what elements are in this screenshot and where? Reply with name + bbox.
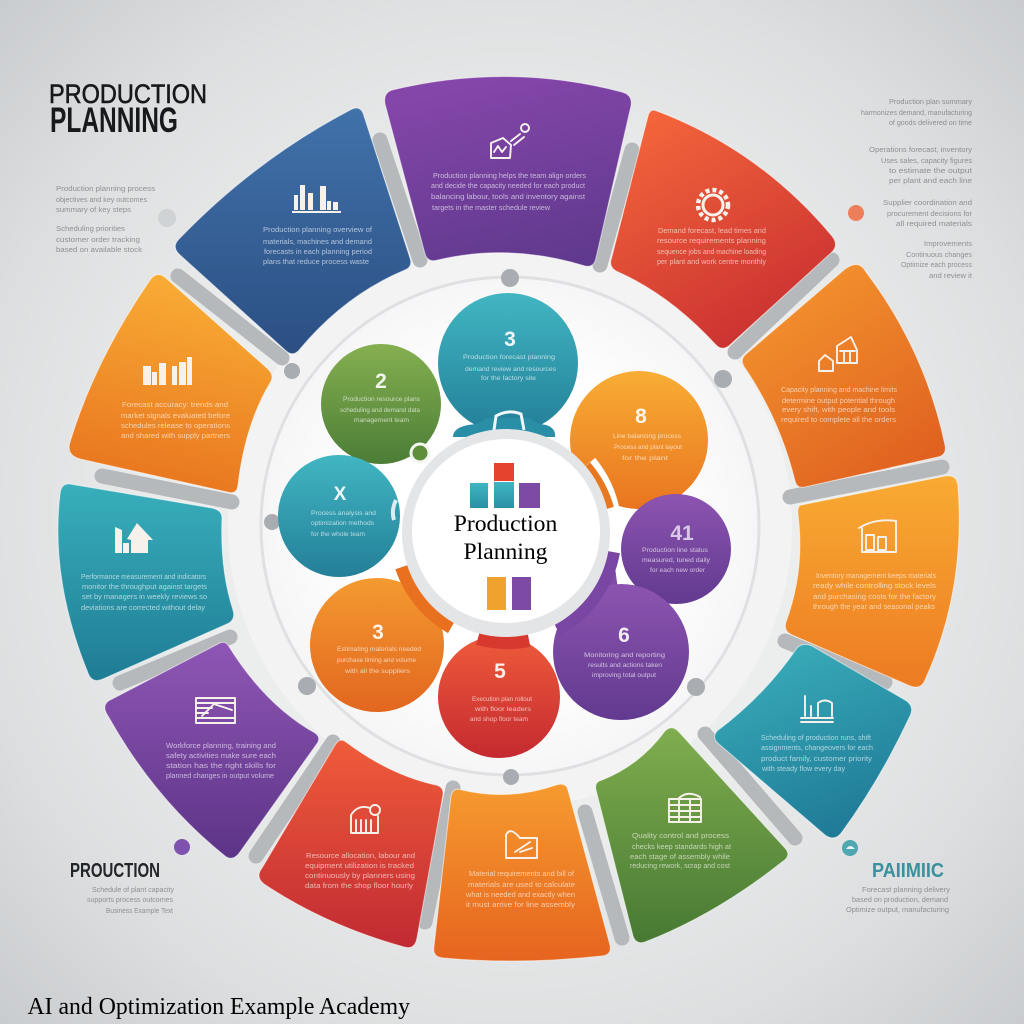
circle copy: with floor leaders [474, 706, 532, 713]
segment shape orange left [69, 274, 272, 493]
text: teal left copy: deviations are corrected without delay [81, 605, 206, 612]
text: blue segment copy [263, 227, 372, 266]
icon: warehouse [859, 520, 896, 552]
side note: top left: Scheduling priorities [56, 226, 126, 233]
text: red lower copy: data from the shop floor hourly [305, 883, 414, 890]
number 3: 3 [372, 621, 384, 644]
icon: orange dot [848, 205, 864, 221]
circle copy: Estimating materials needed [337, 646, 421, 653]
segment shape red top [611, 110, 836, 348]
text: teal left copy: monitor the throughput against targets [82, 584, 208, 591]
text: purple left copy: station has the right skills for [166, 763, 277, 770]
circle copy: and shop floor team [470, 716, 528, 723]
side note: top left: customer order tracking [56, 237, 140, 244]
text: red lower copy [305, 853, 415, 890]
copy [87, 887, 174, 915]
number 3: 3 [504, 328, 516, 351]
text: orange right lower copy: ready while controlling stock levels [813, 583, 937, 590]
circle 2 green [321, 344, 441, 464]
main title [49, 79, 207, 140]
text: purple left copy: planned changes in output volume [166, 773, 274, 780]
text: orange bottom copy [465, 871, 576, 909]
panel: teal right segment [715, 644, 912, 838]
circle copy [613, 433, 682, 462]
segment shape green [596, 728, 788, 943]
text: teal right copy: assignments, changeovers for each [761, 745, 873, 752]
text: purple top copy: and decide the capacity needed for each product [431, 183, 585, 190]
circle copy: purchase timing and volume [337, 657, 416, 664]
segment shape purple left [105, 642, 319, 858]
circle copy: Execution plan rollout [472, 696, 532, 703]
icon: factory dome [351, 805, 380, 833]
circle 6 purple [553, 552, 689, 720]
circle copy: Production resource plans [343, 396, 421, 403]
copy [846, 887, 951, 914]
heading: PAIIMIIC [872, 860, 944, 882]
text: orange left copy: schedules release to operations [121, 423, 231, 430]
circle copy: optimization methods [311, 520, 375, 527]
side note: top right: Optimize each process [901, 262, 972, 269]
text: orange bottom copy: what is needed and exactly when [465, 892, 575, 899]
circle copy [584, 652, 665, 679]
circle copy: for the whole team [311, 531, 365, 538]
side note: top right: all required materials [896, 221, 973, 228]
text: teal right copy: product family, customer priority [761, 756, 873, 763]
icon: grey dot [158, 209, 176, 227]
text: purple left copy: safety activities make sure each [166, 753, 276, 760]
hub connector: coloured arcs [393, 463, 613, 642]
text: red top copy: per plant and work centre monthly [657, 259, 767, 266]
panel: green segment [596, 728, 788, 943]
icon: plan sheet [669, 794, 701, 822]
segment shape teal left [58, 484, 234, 681]
text: orange left copy: and shared with supply partners [121, 433, 231, 440]
text: blue segment copy: Production planning overview of [263, 227, 372, 234]
circle copy: scheduling and demand data [340, 407, 420, 414]
side note: top right: Improvements [924, 241, 973, 248]
copy: Optimize output, manufacturing [846, 907, 949, 914]
text: teal right copy: with steady flow every day [761, 766, 846, 773]
side note: top right: Operations forecast, inventory [869, 147, 973, 154]
text: orange right copy [781, 387, 898, 424]
side note: top right: Uses sales, capacity figures [881, 158, 973, 165]
side note: top right: per plant and each line [889, 178, 972, 185]
icon: blueprint [506, 831, 537, 858]
circle copy: Line balancing process [613, 433, 682, 440]
text: blue segment copy: materials, machines and demand [263, 239, 372, 246]
icon: bar chart [143, 357, 192, 385]
circle copy [463, 354, 557, 382]
icon: bar chart [292, 185, 341, 213]
number 41: 41 [670, 522, 694, 545]
circle copy [470, 696, 532, 723]
text: teal left copy [81, 574, 208, 612]
circle copy: Production line status [642, 547, 709, 554]
segment shape teal right [715, 644, 912, 838]
text: orange left copy: market signals evaluated before [121, 413, 230, 420]
heading: PROUCTION [70, 860, 160, 882]
circle copy [340, 396, 421, 424]
text: red top copy: Demand forecast, lead times and [658, 228, 766, 235]
segment shape orange bottom [434, 784, 610, 961]
side note: bottom right [846, 860, 951, 914]
icon: machine arm [491, 124, 529, 158]
side note: top right: of goods delivered on time [889, 120, 972, 127]
text: purple top copy: balancing labour, tools and inventory against [431, 194, 585, 201]
panel: orange right segment [742, 264, 945, 487]
icon: top bars [470, 463, 540, 509]
icon: teal dot [842, 840, 858, 856]
text: red lower copy: continuously by planners using [305, 873, 415, 880]
icon: gear [698, 190, 728, 220]
text: blue segment copy: forecasts in each planning period [264, 249, 372, 256]
centre title: Production [454, 511, 557, 537]
ring node dots [264, 269, 732, 785]
text: red lower copy: Resource allocation, labour and [306, 853, 415, 860]
segment shape orange right lower [785, 476, 959, 687]
central hub disc and ring [228, 244, 792, 808]
circle copy: for the plant [622, 455, 668, 462]
text: orange right lower copy: Inventory management keeps materials [816, 573, 936, 580]
circle copy: for each new order [650, 567, 706, 574]
circle copy [642, 547, 711, 574]
circle copy: measured, tuned daily [642, 557, 711, 564]
circle copy [311, 510, 376, 538]
grey connector bars between segments [102, 140, 942, 938]
circle X teal [278, 455, 400, 577]
panel: red top segment [611, 110, 836, 348]
panel: orange right lower segment [785, 476, 959, 687]
side note: top left: Production planning process [56, 186, 156, 193]
text: purple left copy [166, 743, 277, 780]
text: teal left copy: Performance measurement and indicators [81, 574, 206, 581]
circle copy: Production forecast planning [463, 354, 555, 361]
text: orange bottom copy: materials are used to calculate [468, 882, 575, 889]
side note: top right: to estimate the output [889, 168, 972, 175]
text: red lower copy: equipment utilization is tracked [305, 863, 414, 870]
circle copy: for the factory site [481, 375, 536, 382]
text: red top copy [657, 228, 767, 266]
number 8: 8 [635, 405, 647, 428]
icon: house chart [115, 523, 153, 553]
text: orange right copy: determine output potential through [782, 398, 895, 405]
copy: supports process outcomes [87, 897, 173, 904]
text: green copy: reducing rework, scrap and cost [630, 863, 730, 870]
text: purple top copy [431, 173, 587, 212]
side note: top right: harmonizes demand, manufacturing [861, 110, 972, 117]
circle 8 orange [570, 371, 708, 509]
panel: orange left segment [69, 274, 272, 493]
side note: top right: procurement decisions for [887, 211, 973, 218]
number 6: 6 [618, 624, 630, 647]
text: orange right lower copy: and purchasing costs for the factory [813, 594, 937, 601]
panel: red lower segment [259, 740, 443, 948]
text: orange right lower copy: through the year and seasonal peaks [813, 604, 936, 611]
circle copy: Process analysis and [311, 510, 376, 517]
side note: top right: Production plan summary [889, 99, 973, 106]
circle copy: with all the suppliers [344, 668, 411, 675]
segment shape purple top [385, 76, 631, 266]
text: orange right copy: Capacity planning and machine limits [781, 387, 898, 394]
icon: purple dot [174, 839, 190, 855]
copy: Forecast planning delivery [862, 887, 951, 894]
panel: orange bottom segment [434, 784, 610, 961]
text: teal right copy [761, 735, 873, 773]
text: orange bottom copy: it must arrive for line assembly [466, 902, 576, 909]
circle 3 orange [310, 578, 444, 712]
segment shape blue [175, 108, 411, 354]
circle copy: Monitoring and reporting [584, 652, 665, 659]
text: purple top copy: Production planning helps the team align orders [433, 173, 587, 180]
panel: purple top segment [385, 76, 631, 266]
text: orange left copy [121, 402, 231, 440]
panel: blue segment [175, 108, 411, 354]
icon: factory building [819, 337, 857, 371]
text: green copy [630, 833, 731, 870]
circle copy: results and actions taken [588, 662, 662, 669]
text: red top copy: sequence jobs and machine loading [657, 249, 766, 256]
number X: X [334, 484, 347, 505]
panel: purple left segment [105, 642, 319, 858]
centre label backing [425, 508, 587, 568]
hub connector: teal handle [453, 412, 555, 437]
copy: Business Example Text [106, 908, 173, 915]
hub connector: green blob [411, 444, 429, 462]
icon: bottom bars [487, 577, 531, 610]
text: red top copy: resource requirements planning [657, 238, 766, 245]
circle copy: Process and plant layout [614, 444, 682, 451]
icon: chart sheet [196, 698, 235, 723]
side note: top right: Continuous changes [906, 252, 973, 259]
panel: teal left segment [58, 484, 234, 681]
side note: top right: and review it [929, 273, 972, 280]
text: green copy: Quality control and process [632, 833, 730, 840]
side note: top left: summary of key steps [56, 207, 132, 214]
side note: top left: objectives and key outcomes [56, 197, 147, 204]
segment shape orange right [742, 264, 945, 487]
circle copy: management team [354, 417, 409, 424]
icon: refinery [801, 696, 833, 722]
side note: bottom left [70, 860, 174, 915]
copy: based on production, demand [852, 897, 948, 904]
number 2: 2 [375, 370, 387, 393]
segment shape red lower [259, 740, 443, 948]
copy: Schedule of plant capacity [92, 887, 174, 894]
text: green copy: each stage of assembly while [630, 854, 730, 861]
circle copy [337, 646, 421, 675]
centre title: Planning [464, 539, 548, 565]
circle copy: improving total output [592, 672, 656, 679]
text: teal left copy: set by managers in weekly reviews so [82, 594, 207, 601]
text: green copy: checks keep standards high at [632, 844, 731, 851]
circle 41 purple [621, 494, 731, 604]
text: purple top copy: targets in the master schedule review [432, 205, 551, 212]
number 5: 5 [494, 660, 506, 683]
text: orange bottom copy: Material requirements and bill of [469, 871, 574, 878]
main title: PLANNING [50, 101, 178, 140]
circle 5 red [438, 636, 560, 758]
centre hub [402, 429, 610, 637]
text: orange right lower copy [813, 573, 937, 611]
side note: top right [861, 99, 973, 280]
main title: PRODUCTION [49, 79, 207, 109]
text: orange right copy: every shift, with people and tools [782, 407, 896, 414]
side note: top right: Supplier coordination and [883, 200, 972, 207]
text: blue segment copy: plans that reduce process waste [263, 259, 369, 266]
side note: top left: based on available stock [56, 247, 143, 254]
text: orange left copy: Forecast accuracy: trends and [122, 402, 228, 409]
side note: top left [56, 186, 156, 254]
text: teal right copy: Scheduling of production runs, shift [761, 735, 871, 742]
footer credit: AI and Optimization Example Academy [28, 994, 410, 1020]
circle 3 teal [438, 293, 578, 433]
text: orange right copy: required to complete all the orders [781, 417, 897, 424]
text: purple left copy: Workforce planning, training and [166, 743, 276, 750]
circle copy: demand review and resources [465, 366, 557, 373]
